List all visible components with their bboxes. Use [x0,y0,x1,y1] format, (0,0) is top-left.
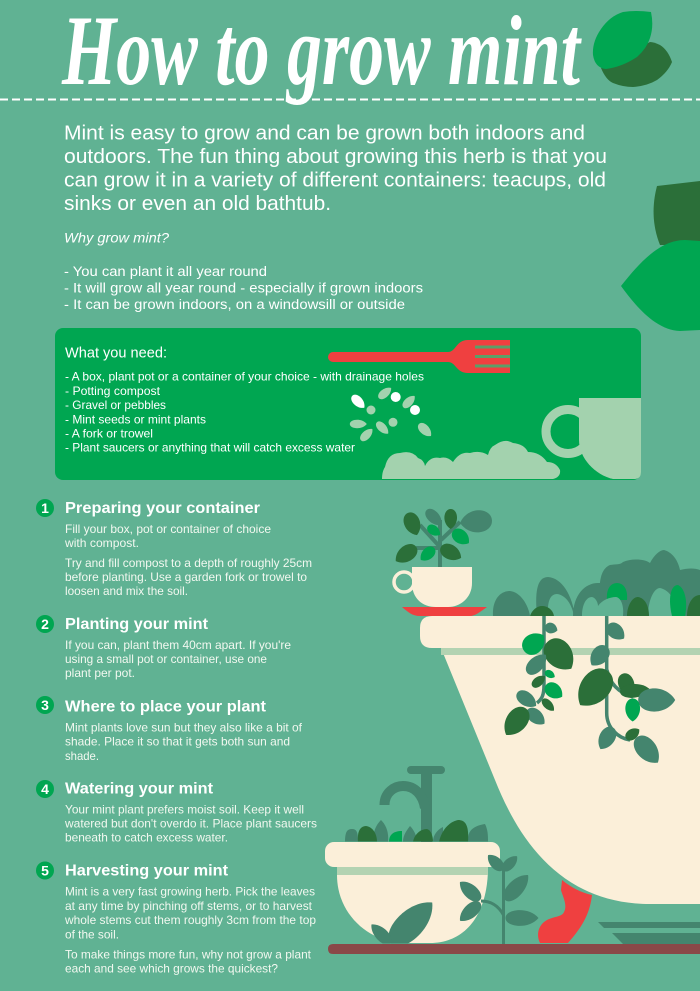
illustration: hanging vine right [569,616,675,769]
illustration: small pot foliage [345,820,488,842]
step 4: watering your mint: Your mint plant prefers moist soil. Keep it well [65,804,304,817]
step 1: preparing your container: Preparing your container [65,500,260,517]
step 1: preparing your container: Fill your box, pot or container of choice [65,523,271,536]
step 4: watering your mint [36,780,317,845]
step 1: preparing your container: with compost. [64,537,139,550]
why grow mint [64,231,423,313]
step 5: harvesting your mint: of the soil. [65,928,119,941]
illustration: shelf [328,944,700,954]
illustration: bathtub foliage [493,550,700,616]
why grow mint: - It will grow all year round - especially if grown indoors [64,280,423,296]
illustration: plates [598,922,700,944]
step 2: planting your mint: If you can, plant them 40cm apart. If you're [65,639,291,652]
what you need list: - Mint seeds or mint plants [65,413,206,426]
illustration: bathtub [420,616,700,904]
illustration: plant in teacup [391,506,493,616]
step 3: where to place your plant: shade. [65,750,99,763]
step 3: where to place your plant: shade. Place it so that it gets both sun and [65,736,290,749]
step 5: harvesting your mint: To make things more fun, why not grow a plant [65,948,312,961]
icon: saucer [402,607,487,616]
what you need list: - Gravel or pebbles [65,399,166,412]
step 5: harvesting your mint: whole stems cut them roughly 3cm from the top [64,914,317,927]
illustration: hanging vine left [498,616,581,741]
intro text: sinks or even an old bathtub. [64,193,331,215]
step 1: preparing your container: Try and fill compost to a depth of roughly 25cm [65,557,312,570]
icon: seeds and leaves [349,385,434,443]
intro text: outdoors. The fun thing about growing this herb is that you [64,146,607,168]
step 4: watering your mint: watered but don't overdo it. Place plant saucers [64,818,317,831]
step 5: harvesting your mint: each and see which grows the quickest? [65,962,278,975]
step 1: preparing your container [36,499,312,598]
icon: soil mound [382,441,560,479]
step 2: planting your mint: plant per pot. [65,667,135,680]
icon: mug [546,398,641,479]
step 2: planting your mint: using a small pot or container, use one [65,653,267,666]
what you need heading: What you need: [65,344,167,362]
why grow mint: - You can plant it all year round [64,264,267,280]
step 1: preparing your container: loosen and mix the soil. [65,585,188,598]
icon: fork [328,340,510,373]
step 5: harvesting your mint [36,862,317,975]
panel: what you need [55,328,641,480]
why grow mint: - It can be grown indoors, on a windowsill or outside [64,297,405,313]
intro text: can grow it in a variety of different containers: teacups, old [64,170,606,192]
step 3: where to place your plant: Mint plants love sun but they also like a bit of [65,722,303,735]
illustration: seedling [455,851,538,944]
step 1: preparing your container: 1 [41,500,49,516]
step 1: preparing your container: before planting. Use a garden fork or trowel to [65,571,308,584]
illustration: tap [384,766,445,845]
icon: title mint leaves [593,11,672,87]
intro text: Mint is easy to grow and can be grown both indoors and [64,122,585,144]
intro text [64,122,607,215]
what you need list: - A fork or trowel [65,427,153,440]
illustration: small pot [325,842,500,953]
step 4: watering your mint: beneath to catch excess water. [65,832,228,845]
step 3: where to place your plant: Where to place your plant [65,698,267,716]
icon: teacup [394,567,472,607]
why grow mint: Why grow mint? [64,231,169,247]
step 2: planting your mint: Planting your mint [65,616,209,633]
what you need list: - Plant saucers or anything that will catch excess water [65,442,355,455]
step 2: planting your mint: 2 [41,616,49,632]
step 4: watering your mint: 4 [41,781,49,797]
step 5: harvesting your mint: Mint is a very fast growing herb. Pick the leaves [65,886,315,899]
step 3: where to place your plant [36,696,303,763]
what you need list [65,371,424,455]
icon: side mint leaves [621,181,700,331]
step 4: watering your mint: Watering your mint [65,780,214,798]
what you need list: - A box, plant pot or a container of your choice - with drainage holes [65,371,424,384]
step 5: harvesting your mint: Harvesting your mint [65,863,229,880]
step 5: harvesting your mint: at any time by pinching off stems, or to harvest [65,900,313,913]
what you need list: - Potting compost [65,385,161,398]
step 5: harvesting your mint: 5 [41,862,49,878]
pot leaves [371,902,432,944]
illustration: bathtub foot [538,880,592,943]
step 2: planting your mint [36,615,291,680]
step 3: where to place your plant: 3 [41,697,49,713]
